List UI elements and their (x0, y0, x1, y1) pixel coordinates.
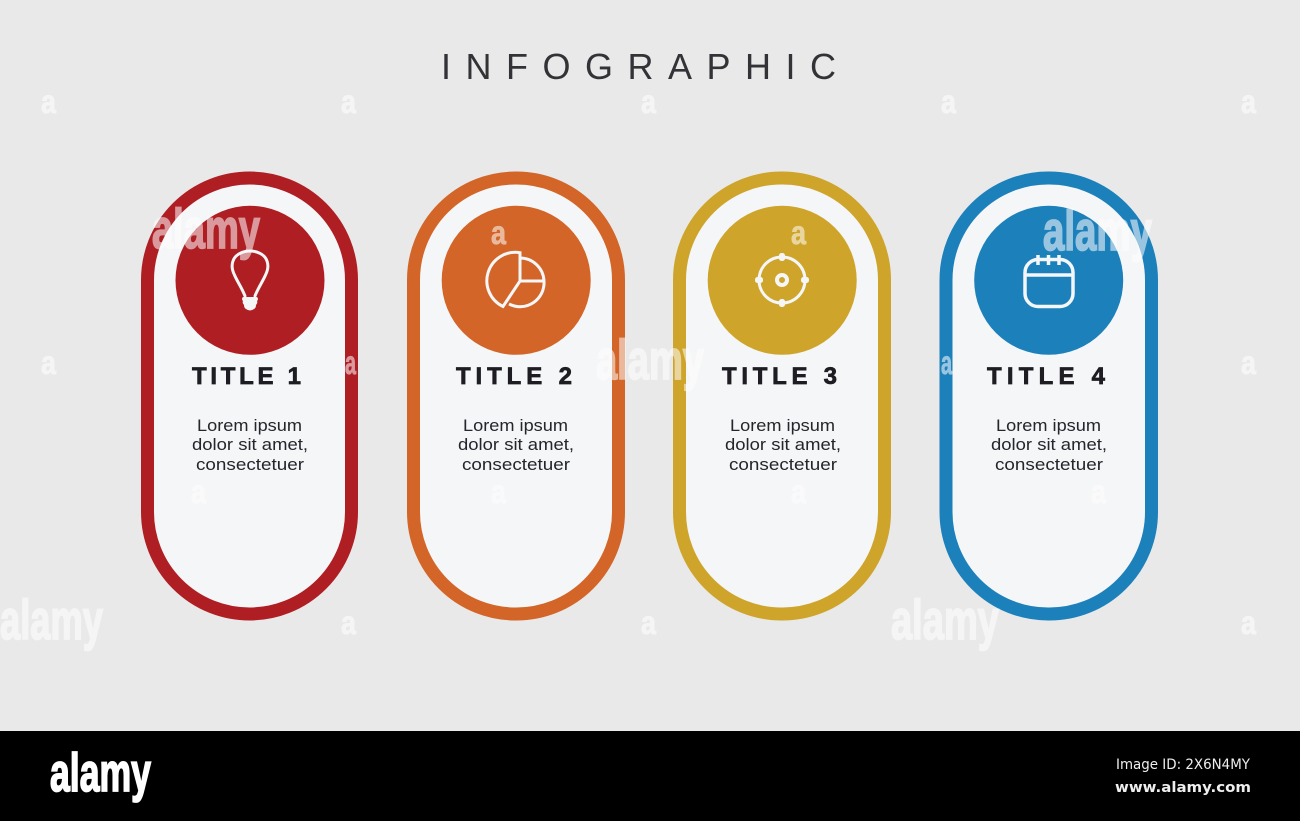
watermarks: alamy (152, 197, 260, 260)
icon badge: target (708, 206, 857, 355)
panel: card 1 (148, 178, 352, 614)
text block (192, 416, 308, 474)
watermarks (0, 83, 1257, 651)
text block: consectetuer (462, 455, 570, 474)
watermarks: a (641, 604, 657, 641)
watermarks: a (41, 344, 57, 381)
heading: TITLE 1 (192, 363, 301, 390)
panel: card 2 (414, 178, 618, 614)
text block: consectetuer (729, 455, 837, 474)
watermarks: a (1241, 83, 1257, 120)
text block (725, 416, 841, 474)
text block: dolor sit amet, (458, 435, 574, 454)
watermarks: a (345, 344, 356, 381)
text block (991, 416, 1107, 474)
text block: consectetuer (196, 455, 304, 474)
text block: Lorem ipsum (197, 416, 302, 435)
text block: dolor sit amet, (991, 435, 1107, 454)
text block (458, 416, 574, 474)
watermarks: alamy (891, 588, 999, 651)
watermarks: a (791, 473, 807, 510)
icon badge: calendar (974, 206, 1123, 355)
icon badge: light bulb (176, 206, 324, 355)
image id: Image ID: 2X6N4MY (1116, 757, 1250, 773)
watermarks: a (191, 473, 207, 510)
watermarks: a (491, 473, 507, 510)
panel: card 4 (946, 178, 1152, 614)
watermarks: a (1241, 344, 1257, 381)
text block: Lorem ipsum (996, 416, 1101, 435)
watermarks: a (1091, 473, 1107, 510)
heading: TITLE 4 (987, 363, 1106, 390)
watermarks: a (341, 604, 357, 641)
watermarks: alamy (596, 328, 704, 391)
watermarks: a (941, 83, 957, 120)
watermarks: a (641, 83, 657, 120)
text block: Lorem ipsum (730, 416, 835, 435)
watermarks: a (941, 344, 952, 381)
watermarks: a (491, 214, 507, 251)
panel: card 3 (680, 178, 884, 614)
title: INFOGRAPHIC (441, 46, 836, 87)
footer logo: alamy (50, 743, 151, 803)
text block: dolor sit amet, (725, 435, 841, 454)
watermarks: a (791, 214, 807, 251)
text block: dolor sit amet, (192, 435, 308, 454)
heading: TITLE 2 (456, 363, 572, 390)
heading: TITLE 3 (722, 363, 837, 390)
watermarks: a (41, 83, 57, 120)
text block: Lorem ipsum (463, 416, 568, 435)
footer bar (0, 731, 1300, 821)
watermarks: alamy (0, 588, 103, 651)
watermarks: a (1241, 604, 1257, 641)
watermarks: alamy (1043, 199, 1152, 262)
watermarks: a (341, 83, 357, 120)
website: www.alamy.com (1115, 780, 1251, 796)
text block: consectetuer (995, 455, 1103, 474)
icon badge: pie chart (442, 206, 591, 355)
